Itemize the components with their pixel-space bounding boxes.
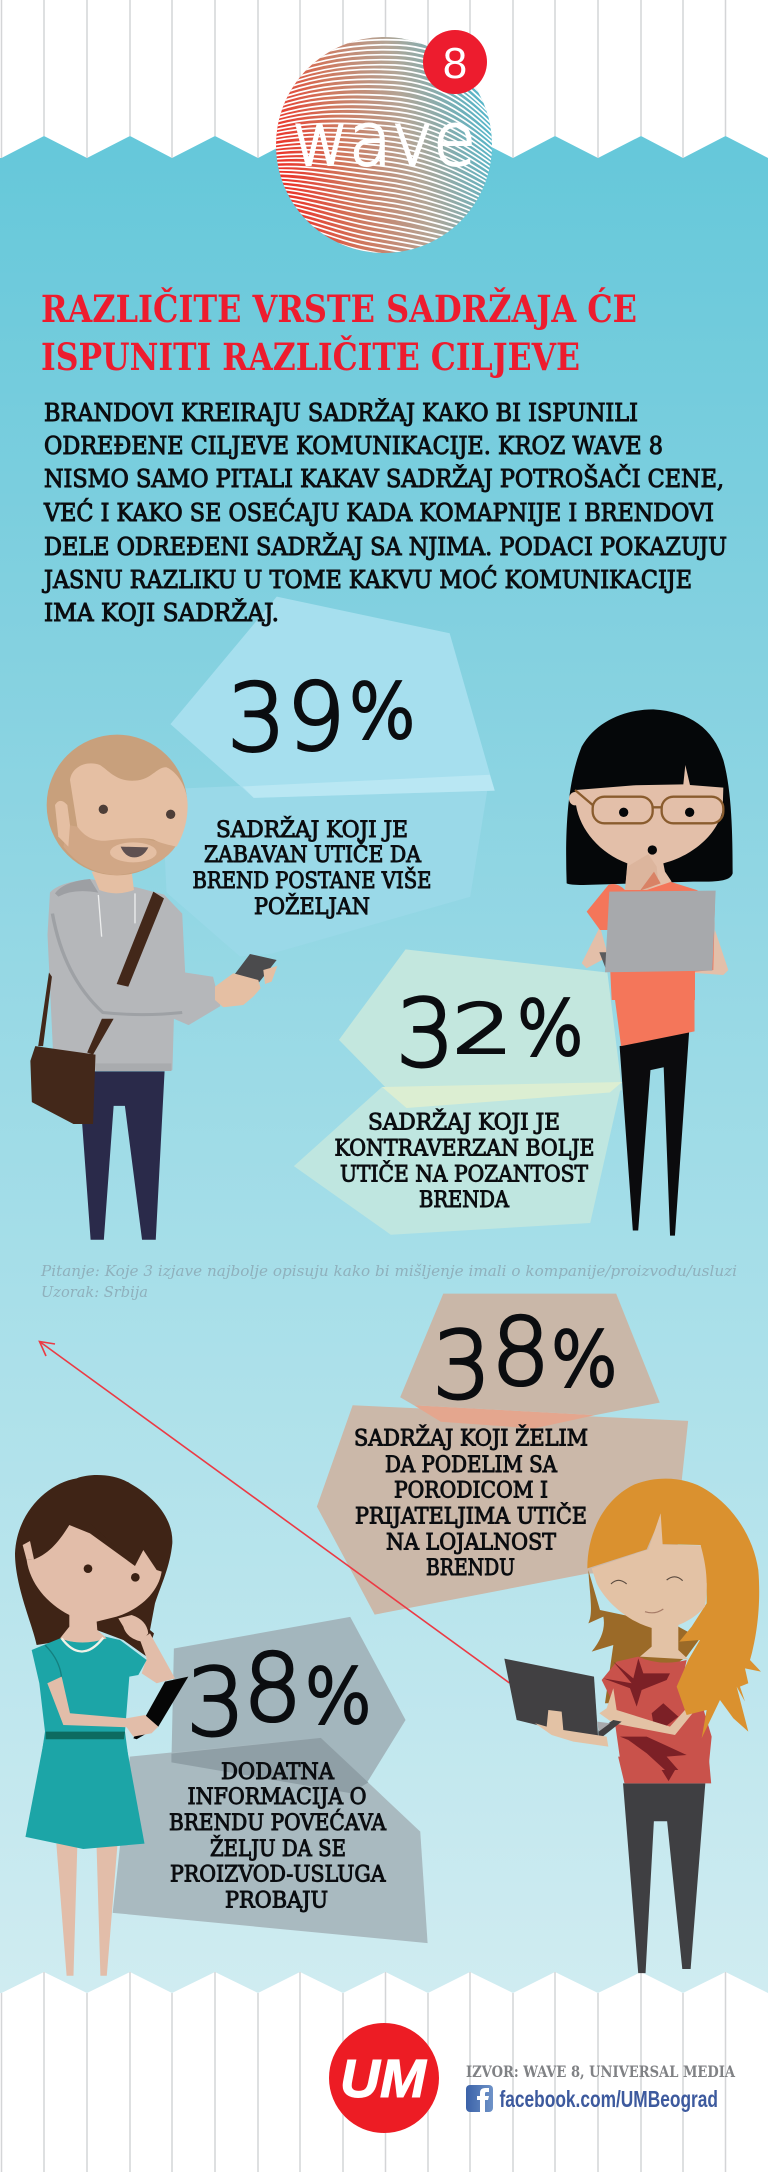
caption: 38% loyalty: SADRŽAJ KOJI ŽELIM [354, 1424, 588, 1452]
darker hair behind neck [588, 1570, 700, 1703]
caption: 38% loyalty [354, 1424, 588, 1581]
face [592, 1513, 707, 1629]
intro text block: IMA KOJI SADRŽAJ. [44, 598, 279, 627]
floral pattern [603, 1658, 687, 1770]
teal skirt [25, 1732, 144, 1849]
tablet [133, 1677, 188, 1739]
stat: 39%: % [349, 668, 416, 756]
stat: 38% loyalty: % [551, 1316, 618, 1404]
stat: 39%: 9 [286, 663, 345, 771]
intro text block [41, 398, 727, 627]
ear and face [569, 792, 581, 805]
stat: 39% [227, 663, 416, 772]
arm to tablet [47, 1677, 158, 1737]
necklace [62, 1638, 103, 1651]
arm and hand [599, 1688, 703, 1735]
man hoodie [48, 879, 220, 1070]
caption: 38% information [169, 1760, 387, 1914]
brown hair [15, 1475, 172, 1657]
arm to chin [140, 1633, 175, 1683]
intro text block: NISMO SAMO PITALI KAKAV SADRŽAJ POTROŠAČI CENE, [44, 464, 724, 493]
caption: 38% loyalty: BRENDU [426, 1556, 515, 1581]
survey note: Pitanje: Koje 3 izjave najbolje opisuju kako bi mišljenje imali o kompanije/proizvodu/usluzi [40, 1262, 737, 1280]
caption: 38% information: INFORMACIJA O [188, 1785, 366, 1810]
stat: 38% information: 3 [186, 1648, 245, 1756]
laptop hand [535, 1710, 608, 1747]
top picket fence [0, 0, 768, 158]
stat: 38% loyalty: 8 [491, 1298, 550, 1406]
man bag and straps [30, 973, 114, 1124]
caption: 32%: UTIČE NA POZANTOST [340, 1160, 588, 1188]
man phone and hand [232, 954, 277, 983]
figure: woman with tablet [15, 1475, 188, 1976]
intro text block: DELE ODREĐENI SADRŽAJ SA NJIMA. PODACI POKAZUJU [44, 532, 727, 561]
caption: 39%: BREND POSTANE VIŠE [192, 867, 432, 894]
man strap [117, 892, 164, 987]
man neck [92, 872, 134, 893]
teal dress [32, 1637, 147, 1770]
caption: 32%: BRENDA [419, 1188, 510, 1213]
intro text block: ODREĐENE CILJEVE KOMUNIKACIJE. KROZ WAVE 8 [44, 432, 663, 460]
caption: 38% loyalty: PORODICOM I [394, 1478, 548, 1504]
caption: 39%: SADRŽAJ KOJI JE [216, 816, 408, 843]
hand at mouth [625, 854, 658, 890]
stat: 32% [396, 980, 584, 1088]
arrow [40, 1342, 510, 1683]
figure: woman with laptop, black hair [566, 709, 733, 1236]
stat: 32%: 3 [396, 980, 455, 1088]
stat: 38% information [186, 1634, 372, 1756]
grey trousers [623, 1783, 705, 1973]
neck [640, 1623, 688, 1659]
title: RAZLIČITE VRSTE SADRŽAJA ĆE [41, 287, 637, 331]
man hood [55, 879, 98, 897]
bottom picket fence [0, 1972, 768, 2172]
speech bubbles: 38% loyalty [317, 1294, 688, 1615]
caption: 38% information: DODATNA [221, 1760, 335, 1785]
figure: woman with laptop, orange hair [504, 1479, 761, 1973]
logo: wave 8 [276, 30, 492, 253]
orange top [587, 882, 715, 1000]
figure: man with phone [30, 735, 277, 1240]
intro text block: BRANDOVI KREIRAJU SADRŽAJ KAKO BI ISPUNILI [44, 398, 638, 427]
arms [582, 927, 728, 975]
speech bubbles: 32% [294, 949, 622, 1235]
glasses [575, 790, 723, 823]
black hair [566, 709, 733, 885]
stat: 39%: 3 [227, 664, 286, 772]
red top lower part [618, 1757, 711, 1783]
title: ISPUNITI RAZLIČITE CILJEVE [41, 335, 580, 379]
caption: 39%: ZABAVAN UTIČE DA [204, 841, 422, 868]
man trousers [78, 1071, 165, 1240]
stat: 38% information: % [305, 1652, 372, 1740]
survey note [40, 1262, 737, 1301]
logo number badge: 8 [443, 39, 467, 88]
black trousers [620, 1031, 689, 1236]
caption: 38% information: BRENDU POVEĆAVA [169, 1809, 387, 1836]
woman legs [56, 1844, 118, 1976]
logo word: wave [292, 97, 476, 183]
caption: 32%: KONTRAVERZAN BOLJE [334, 1136, 594, 1162]
orange top lower part [610, 960, 695, 1046]
caption: 38% loyalty: DA PODELIM SA [385, 1453, 558, 1478]
caption: 38% information: PROBAJU [225, 1888, 328, 1914]
hand at chin [118, 1615, 148, 1642]
survey note: Uzorak: Srbija [41, 1283, 148, 1301]
stat: 32%: % [517, 984, 584, 1072]
intro text block: VEĆ I KAKO SE OSEĆAJU KADA KOMAPNIJE I BRENDOVI [43, 498, 714, 527]
caption: 38% loyalty: NA LOJALNOST [386, 1530, 556, 1556]
caption: 38% loyalty: PRIJATELJIMA UTIČE [355, 1502, 587, 1530]
logo: UM: UM [340, 2049, 427, 2109]
orange hair [587, 1479, 761, 1738]
caption: 38% information: ŽELJU DA SE [210, 1835, 346, 1862]
caption: 32%: SADRŽAJ KOJI JE [368, 1108, 560, 1136]
caption: 32% [334, 1108, 594, 1213]
caption: 38% information: PROIZVOD-USLUGA [170, 1862, 387, 1888]
stat: 38% information: 8 [243, 1634, 302, 1742]
face and neck [27, 1525, 162, 1642]
logo: UM [329, 2023, 439, 2133]
black laptop [504, 1659, 598, 1740]
title [41, 287, 637, 379]
logo number badge [423, 30, 487, 94]
grey laptop [599, 952, 607, 969]
stat: 38% loyalty: 3 [432, 1312, 491, 1420]
speech bubbles: 39% [162, 597, 495, 957]
belt [46, 1732, 125, 1739]
stat: 38% loyalty [432, 1298, 618, 1420]
caption: 39%: POŽELJAN [254, 893, 370, 920]
caption: 39% [192, 816, 432, 920]
red floral top [602, 1657, 712, 1770]
speech bubbles: 38% information [113, 1617, 428, 1943]
icon: facebook [466, 2085, 493, 2112]
intro text block: JASNU RAZLIKU U TOME KAKVU MOĆ KOMUNIKACIJE [41, 565, 692, 594]
man head [47, 735, 187, 875]
stat: 32%: 2 [453, 990, 512, 1068]
